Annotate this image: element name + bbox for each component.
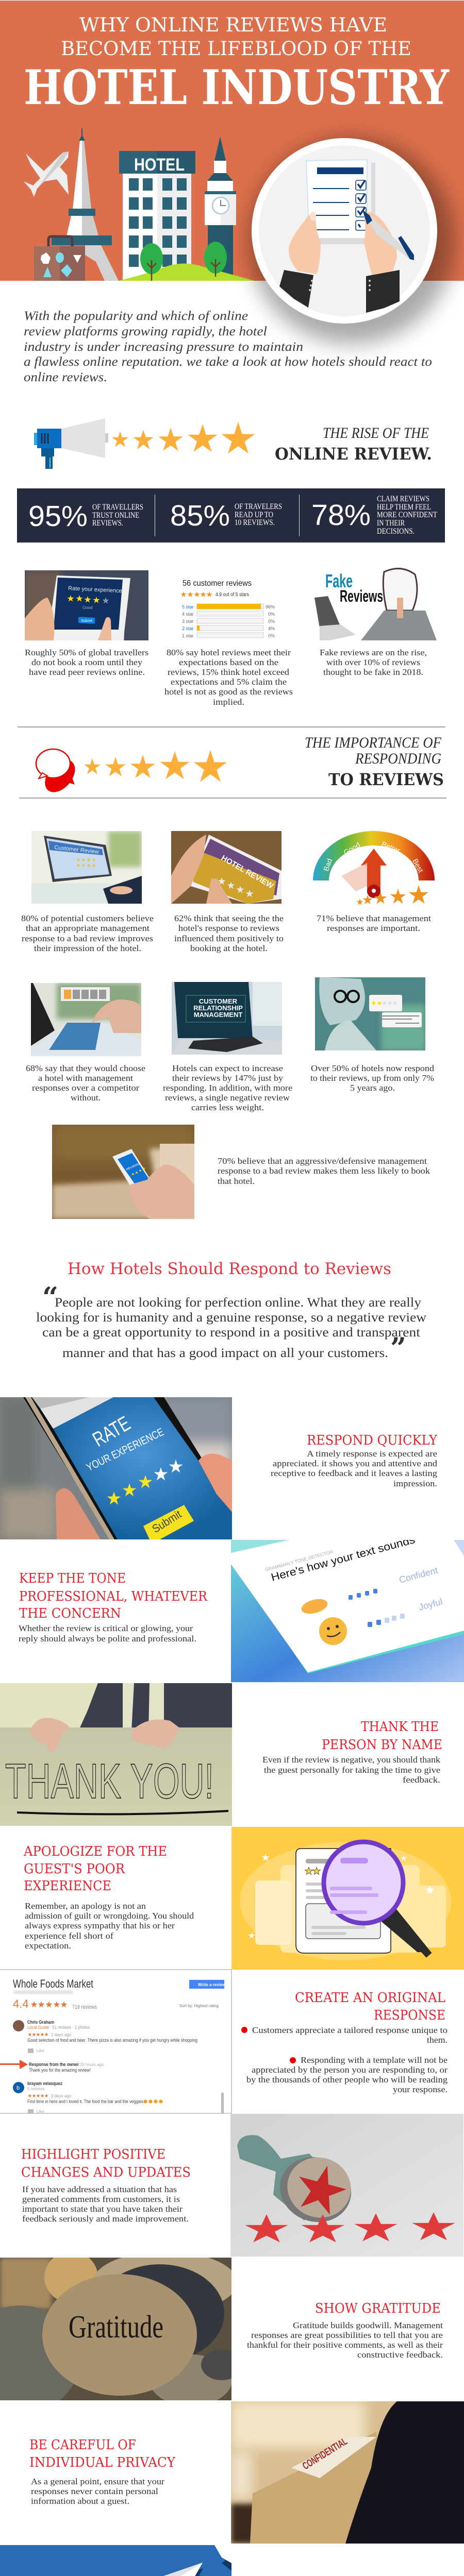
heading and bullets: them. <box>427 2035 448 2045</box>
text: importance captions row two: 5 years ago. <box>350 1083 395 1093</box>
heading and text: generated comments from customers, it is <box>22 2194 180 2204</box>
image: customer reviews screenshot: 0% <box>268 619 275 624</box>
quote: ” <box>390 1331 406 1364</box>
image: tone detector: Confident <box>398 1565 439 1585</box>
text: importance captions row one: influenced them positively to <box>174 934 284 943</box>
stat: 78%: IN THEIR <box>377 519 405 528</box>
heading and text: expectation. <box>25 1941 71 1951</box>
icon: airplane <box>24 151 69 197</box>
heading and text: SHOW GRATITUDE <box>315 2301 441 2316</box>
heading and bullets: by the thousands of other people who will be reading <box>246 2075 448 2084</box>
quote: People are not looking for perfection online. What they are really <box>55 1296 422 1310</box>
text: importance captions row two: responding. In addition, with more <box>163 1083 292 1093</box>
image: review screenshot: Whole Foods Market <box>13 1977 93 1990</box>
image: customer reviews screenshot: 96% <box>266 604 275 609</box>
image: customer relationship management laptop: MANAGEMENT <box>194 1011 242 1019</box>
heading and text: THANK THE <box>361 1719 439 1735</box>
heading and text: GUEST'S POOR <box>24 1861 125 1877</box>
text: importance captions row one: 71% believe that management <box>317 913 431 923</box>
text: importance captions row one: booking at the hotel. <box>190 943 268 953</box>
panel: keep the tone professional <box>19 1534 464 1682</box>
image: customer relationship management laptop: CUSTOMER <box>199 997 238 1005</box>
text block: introduction: review platforms growing rapidly, the hotel <box>24 325 267 338</box>
image: review screenshot: · 51 reviews · 2 photos <box>50 2025 90 2030</box>
heading: importance of responding <box>305 734 444 789</box>
heading: how hotels should respond: How Hotels Should Respond to Reviews <box>68 1260 391 1278</box>
heading and text: experience fell short of <box>25 1931 113 1941</box>
image: rating gauge <box>313 831 435 905</box>
image: review screenshot: 716 reviews <box>72 2004 97 2010</box>
panel: consider following up <box>0 2545 231 2576</box>
heading and text: HIGHLIGHT POSITIVE <box>21 2147 165 2162</box>
heading and text <box>262 1719 442 1785</box>
text: aggressive response caption: 70% believe that an aggressive/defensive management <box>218 1156 427 1166</box>
text: importance captions row two: 68% say that they would choose <box>26 1063 145 1073</box>
image: tablet rate your experience: Good <box>82 605 93 610</box>
stat: 78%: CLAIM REVIEWS <box>377 495 429 503</box>
heading: importance of responding: RESPONDING <box>355 750 441 767</box>
image: review screenshot: 4.4 <box>13 1997 29 2010</box>
panel: respond quickly <box>0 1397 438 1539</box>
icon: suitcase <box>34 236 85 281</box>
image: customer reviews screenshot: 0% <box>268 612 275 617</box>
panel: apologize <box>23 1827 464 1970</box>
image: customer relationship management laptop <box>172 982 282 1055</box>
panel: hero banner <box>0 1 464 281</box>
image: review screenshot: Like <box>37 2048 44 2053</box>
image: review screenshot: b <box>16 2085 20 2091</box>
text: importance captions row two <box>26 1063 435 1112</box>
heading and text: EXPERIENCE <box>24 1878 111 1894</box>
image: customer reviews screenshot: 3 star <box>182 619 194 624</box>
heading and text: As a general point, ensure that your <box>31 2477 164 2486</box>
image: review screenshot: 2 days ago <box>51 2032 72 2037</box>
heading and text: appreciated. it shows you and attentive and <box>273 1459 438 1468</box>
image: review screenshot: Chris Graham <box>27 2020 54 2025</box>
heading and text: THE CONCERN <box>19 1606 121 1621</box>
stat: 95%: TRUST ONLINE <box>92 511 139 520</box>
image: tablet rate your experience: Rate your experience <box>68 585 122 594</box>
heading and text: admission of guilt or wrongdoing. You should <box>25 1911 194 1921</box>
image: gratitude stone <box>0 2258 231 2400</box>
text: rise section captions: hotel is not as good as the reviews <box>164 687 293 697</box>
image: fake reviews: Fake <box>325 570 353 591</box>
image: review screenshot: Sort by: Highest rating <box>179 2004 219 2008</box>
image: tone detector: Here's how your text sounds <box>270 1534 416 1584</box>
image: review screenshot: 3 days ago <box>51 2094 72 2098</box>
heading and text <box>19 1571 208 1643</box>
panel: show gratitude <box>0 2258 443 2400</box>
text: aggressive response caption <box>218 1156 430 1186</box>
icon: hotel building: HOTEL <box>134 155 185 175</box>
quote: “ <box>42 1281 58 1314</box>
image: customer relationship management laptop: RELATIONSHIP <box>193 1004 243 1012</box>
stat: 85% <box>170 499 282 532</box>
heading and text: constructive feedback. <box>357 2350 443 2360</box>
image: review screenshot: First time in here and I loved it. The food the bar and the veggies <box>27 2099 143 2104</box>
image: rating gauge: Good <box>342 841 361 857</box>
heading and text: thankful for their positive comments, as well as their <box>247 2340 443 2350</box>
heading and text: If you have addressed a situation that has <box>22 2184 177 2194</box>
stat: 85%: 10 REVIEWS. <box>235 518 275 527</box>
image: customer reviews screenshot: 4 star <box>182 612 194 617</box>
image: customer reviews screenshot: 1 star <box>182 633 194 638</box>
heading and text: reply should always be polite and professional. <box>19 1634 196 1643</box>
image: customer reviews screenshot: 56 customer reviews <box>183 579 252 588</box>
text: aggressive response caption: response to a bad review makes them less likely to book <box>218 1166 430 1176</box>
text: importance captions row two: Over 50% of hotels now respond <box>311 1063 435 1073</box>
text: rise section captions: expectations and 5% claim the <box>171 677 287 687</box>
image: magnifier review <box>231 1827 464 1970</box>
image: review screenshot: 5 reviews <box>27 2087 45 2091</box>
text: rise section captions: Fake reviews are on the rise, <box>320 648 427 657</box>
text: importance captions row one: response to a bad review improves <box>22 934 153 943</box>
text: importance captions row two: reviews, a single negative review <box>165 1093 290 1103</box>
image: rating gauge: Bad <box>322 857 334 872</box>
stat: 78%: HELP THEM FEEL <box>377 503 431 512</box>
stat: 85%: OF TRAVELERS <box>235 502 282 511</box>
heading and text <box>21 2147 191 2224</box>
icon: eiffel tower <box>52 128 119 281</box>
image: star stamp <box>230 2114 463 2257</box>
text: importance captions row one: 62% think that seeing the the <box>174 913 284 923</box>
heading: importance of responding: TO REVIEWS <box>328 770 444 789</box>
panel: create an original response <box>0 1970 448 2114</box>
heading and bullets: CREATE AN ORIGINAL <box>295 1990 445 2006</box>
text: aggressive response caption: that hotel. <box>218 1176 255 1186</box>
image: rating gauge: Better <box>380 840 402 855</box>
text: importance captions row two: their reviews by 147% just by <box>172 1073 284 1083</box>
image: confidential folder <box>231 2401 464 2544</box>
image: fake reviews <box>310 567 437 640</box>
heading and text: APOLOGIZE FOR THE <box>23 1844 167 1859</box>
image: phone customer review: REVIEWS <box>126 1163 140 1172</box>
image: rate your experience phone <box>0 1397 232 1539</box>
text: rise section captions: reviews, 15% think hotel exceed <box>168 667 290 677</box>
text: importance captions row one: hotel's response to reviews <box>178 923 279 933</box>
heading and bullets: Customers appreciate a tailored response unique to <box>252 2025 448 2035</box>
panel: thank the person <box>0 1683 442 1826</box>
heading: rise of the online review: ONLINE REVIEW. <box>275 444 432 464</box>
stat: 85%: 85% <box>170 499 230 532</box>
text block: introduction: a flawless online reputation. we take a look at how hotels should react to <box>24 355 432 369</box>
stat: 78%: MORE CONFIDENT <box>377 511 437 519</box>
heading and bullets: appreciated by the person you are responding to, or <box>252 2065 448 2075</box>
image: review screenshot: Write a review <box>198 1982 226 1987</box>
text block: introduction <box>24 309 432 384</box>
heading and bullets <box>241 1990 448 2094</box>
image: gratitude stone: Gratitude <box>69 2310 163 2345</box>
text: rise section captions: thought to be fake in 2018. <box>323 667 423 677</box>
text: importance captions row one: their impression of the hotel. <box>34 943 141 953</box>
title: WHY ONLINE REVIEWS HAVE <box>79 14 387 36</box>
heading and text: Whether the review is critical or glowing, your <box>19 1623 193 1633</box>
text block: introduction: industry is under increasing pressure to maintain <box>24 340 303 354</box>
text: importance captions row two: without. <box>71 1093 101 1103</box>
stat: 78% <box>311 495 437 536</box>
heading and text: always express sympathy that his or her <box>25 1921 175 1930</box>
heading and text <box>29 2437 176 2506</box>
image: customer review monitor: Customer Review <box>54 844 99 855</box>
text: importance captions row two: a hotel with management <box>38 1073 133 1083</box>
image: customer reviews screenshot: 4.9 out of 5 stars <box>216 592 249 598</box>
image: tone detector <box>231 1534 464 1682</box>
icon: speech bubbles with stars <box>36 749 227 798</box>
panel: individual privacy <box>29 2401 464 2544</box>
icon: megaphone with stars <box>34 418 255 469</box>
heading and text: CHANGES AND UPDATES <box>21 2165 191 2180</box>
heading and text: receptive to feedback and it leaves a lasting <box>271 1468 438 1478</box>
image: rate your experience phone: YOUR EXPERIENCE <box>85 1426 166 1473</box>
icon: clock tower <box>205 137 236 281</box>
image: confidential folder: CONFIDENTIAL <box>301 2436 350 2472</box>
image: review screenshot: Response from the owner <box>29 2062 79 2067</box>
image: tone detector: GRAMMARLY TONE DETECTOR <box>264 1549 334 1572</box>
text block: introduction: online reviews. <box>24 370 107 384</box>
title <box>24 14 450 115</box>
text: rise section captions <box>25 648 427 707</box>
heading and text: information about a guest. <box>31 2496 129 2506</box>
heading and text: PROFESSIONAL, WHATEVER <box>19 1589 208 1604</box>
text: rise section captions: have read peer reviews online. <box>29 667 145 677</box>
heading and bullets: RESPONSE <box>374 2008 445 2023</box>
heading and text: the guest personally for taking the time to give <box>264 1765 440 1775</box>
image: review screenshot: Local Guide <box>27 2025 49 2030</box>
heading: rise of the online review: THE RISE OF THE <box>323 425 429 442</box>
image: review screenshot: brayam velasquez <box>27 2081 62 2086</box>
stat: 85%: READ UP TO <box>235 511 273 519</box>
heading: rise of the online review <box>275 425 432 464</box>
text: importance captions row two: carries less weight. <box>191 1103 264 1112</box>
heading and text: A timely response is expected are <box>307 1449 437 1459</box>
heading and text: responses are great possibilities to tell that you are <box>251 2330 443 2340</box>
image: phone customer review <box>52 1125 194 1219</box>
stat: 95%: 95% <box>28 500 88 533</box>
arrow <box>0 2060 28 2069</box>
heading and text: responses never contain personal <box>31 2486 158 2496</box>
heading and text: RESPOND QUICKLY <box>307 1433 438 1448</box>
text: importance captions row two: responses over a competitor <box>32 1083 139 1093</box>
heading and text <box>271 1433 438 1488</box>
text: importance captions row two: to their reviews, up from only 7% <box>310 1073 434 1083</box>
text: rise section captions: implied. <box>213 697 244 707</box>
icon: hill and trees <box>119 242 255 281</box>
image: rate your experience phone: Submit <box>150 1507 184 1535</box>
image: review screenshot: Like <box>37 2109 44 2114</box>
icon: checklist circle <box>252 138 437 324</box>
image: thank you card <box>0 1683 232 1826</box>
heading and text <box>23 1844 194 1951</box>
panel: statistics band <box>17 488 445 543</box>
text block: introduction: With the popularity and which of online <box>24 309 248 323</box>
stat: 95%: REVIEWS. <box>92 519 123 528</box>
image: rate your experience phone: RATE <box>89 1412 134 1451</box>
quote: looking for is humanity and a genuine response, so a negative review <box>36 1311 426 1325</box>
heading and text <box>247 2301 443 2360</box>
image: customer reviews screenshot <box>180 579 275 638</box>
image: woman with star rating <box>315 977 425 1050</box>
text: rise section captions: Roughly 50% of global travellers <box>25 648 148 657</box>
text: importance captions row one: that an appropriate management <box>26 923 150 933</box>
image: review screenshot <box>0 1970 231 2114</box>
image: hotel review tablet: HOTEL REVIEW <box>220 854 275 891</box>
image: customer review monitor <box>31 831 142 904</box>
heading and text: PERSON BY NAME <box>322 1737 442 1753</box>
heading and bullets: Responding with a template will not be <box>301 2055 448 2065</box>
text: importance captions row two: Hotels can expect to increase <box>172 1063 283 1073</box>
panel: highlight positive changes <box>21 2114 463 2257</box>
image: laptop one star rating <box>31 983 141 1056</box>
heading and text: impression. <box>393 1479 437 1488</box>
title: BECOME THE LIFEBLOOD OF THE <box>61 38 411 60</box>
image: hotel review tablet <box>171 831 281 904</box>
image: review screenshot: Good selection of food and beer. There pizza is also amazing if you get hungry while shopping <box>27 2038 197 2043</box>
text: rise section captions: do not book a room until they <box>31 657 143 667</box>
image: paper planes <box>0 2545 231 2576</box>
heading and text: Gratitude builds goodwill. Management <box>293 2320 443 2330</box>
image: customer reviews screenshot: 2 star <box>182 626 194 631</box>
image: customer reviews screenshot: 0% <box>268 633 275 638</box>
text: importance captions row one <box>21 913 431 953</box>
image: tablet rate your experience <box>25 570 148 644</box>
image: thank you card: THANK YOU! <box>5 1754 214 1809</box>
text: rise section captions: expectations based on the <box>179 657 278 667</box>
heading and text: Even if the review is negative, you should thank <box>262 1755 441 1765</box>
heading and text: important to state that you have taken their <box>22 2204 183 2214</box>
text: rise section captions: with over 10% of reviews <box>326 657 420 667</box>
text: rise section captions: 80% say hotel reviews meet their <box>167 648 291 657</box>
icon: hotel building <box>119 151 195 281</box>
image: review screenshot: Thank you for the amazing review! <box>29 2067 91 2073</box>
image: tone detector: Joyful <box>418 1596 443 1613</box>
heading and text: Remember, an apology is not an <box>25 1901 146 1911</box>
image: tablet rate your experience: Submit <box>81 619 92 623</box>
quote: can be a great opportunity to respond in a positive and transparent <box>42 1326 420 1340</box>
image: customer reviews screenshot: 4% <box>268 626 275 631</box>
image: rating gauge: Best <box>411 857 425 874</box>
shadow behind checklist circle <box>248 138 455 344</box>
heading: importance of responding: THE IMPORTANCE OF <box>305 734 442 751</box>
quote <box>36 1281 426 1364</box>
stat: 95% <box>28 500 143 533</box>
heading and text: BE CAREFUL OF <box>29 2437 136 2453</box>
heading and text: KEEP THE TONE <box>19 1571 126 1586</box>
text: importance captions row one: 80% of potential customers believe <box>21 913 154 923</box>
stat: 78%: DECISIONS. <box>377 527 415 536</box>
image: customer reviews screenshot: 5 star <box>182 604 194 609</box>
stat: 78%: 78% <box>311 499 371 532</box>
image: review screenshot: 20 hours ago <box>80 2062 104 2067</box>
heading and text: feedback. <box>403 1775 440 1785</box>
stat: 95%: OF TRAVELLERS <box>92 503 143 512</box>
heading and bullets: your response. <box>393 2084 448 2094</box>
image: fake reviews: Reviews <box>340 587 383 605</box>
heading and text: INDIVIDUAL PRIVACY <box>29 2455 176 2470</box>
text: importance captions row one: responses are important. <box>327 923 420 933</box>
heading and text: feedback seriously and made improvement. <box>22 2214 189 2224</box>
quote: manner and that has a good impact on all your customers. <box>62 1346 388 1360</box>
